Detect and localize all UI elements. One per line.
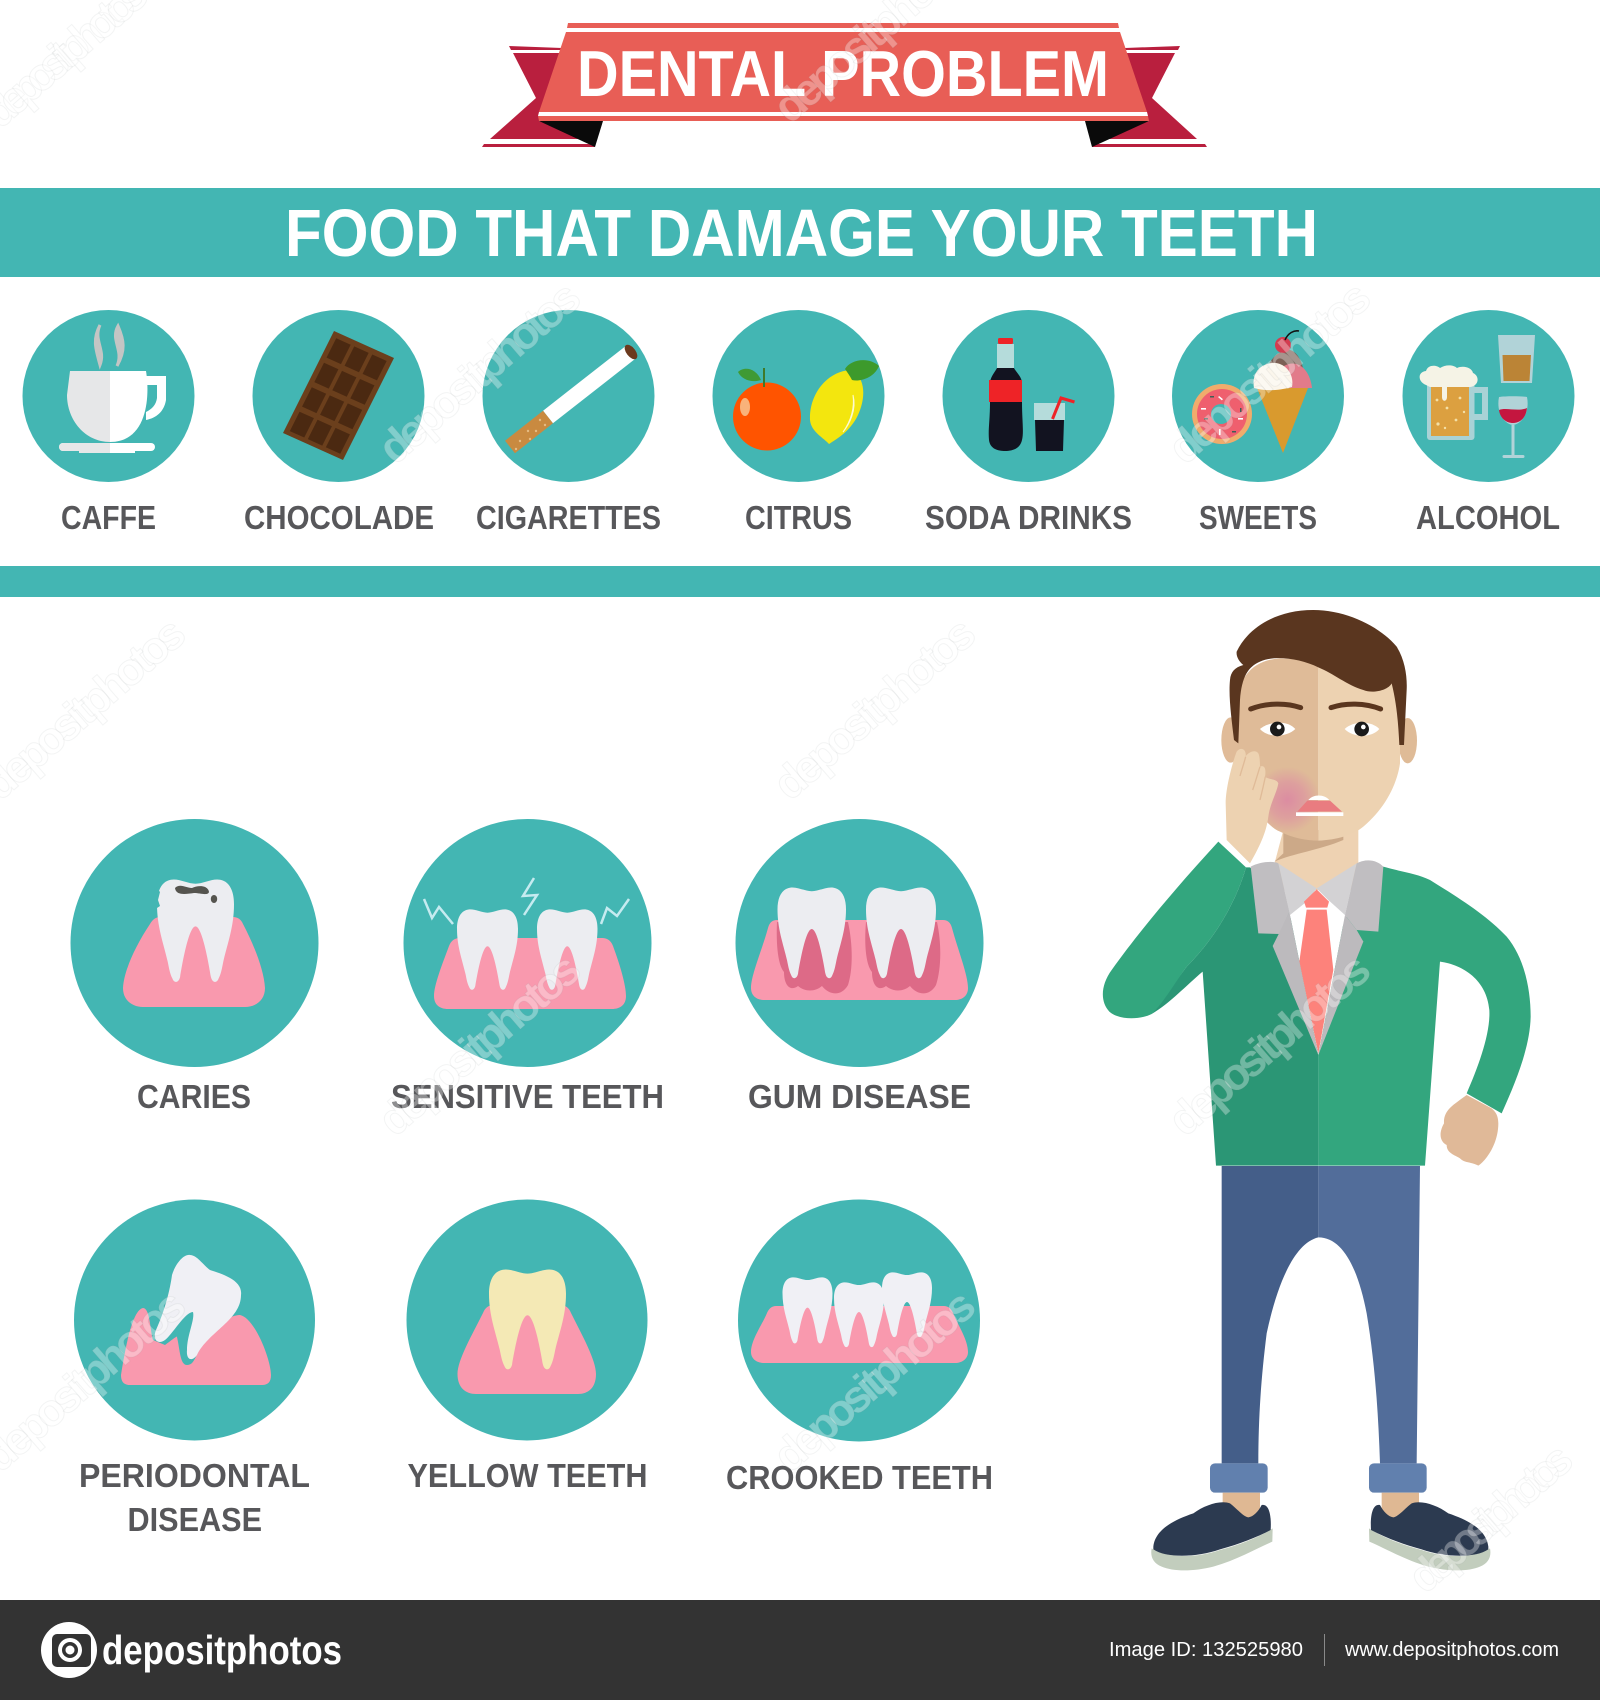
label: crooked teeth: CROOKED TEETH (726, 1459, 993, 1496)
label: chocolade: CHOCOLADE (244, 499, 434, 536)
trousers (1210, 1166, 1427, 1493)
label: citrus: CITRUS (745, 499, 852, 536)
title ribbon: dental problem (482, 23, 1207, 147)
title text: DENTAL PROBLEM (577, 37, 1109, 110)
label: periodontal disease: DISEASE (128, 1501, 262, 1538)
footer bar (0, 1600, 1600, 1700)
label: gum disease: GUM DISEASE (748, 1078, 971, 1115)
divider band (0, 566, 1600, 597)
heading band: food that damage your teeth: FOOD THAT DAMAGE YOUR TEETH (285, 196, 1318, 271)
food item: soda drinks (942, 310, 1114, 482)
label: sweets: SWEETS (1199, 499, 1317, 536)
feet (1151, 1493, 1490, 1570)
problem: caries (70, 819, 318, 1115)
neck (1274, 830, 1358, 890)
food item: citrus (712, 310, 884, 482)
label: cigarettes: CIGARETTES (476, 499, 661, 536)
food item: cigarette (482, 310, 654, 482)
watermarks: depositphotos (763, 607, 985, 810)
panel: foods (22, 310, 1574, 536)
label: periodontal disease: PERIODONTAL (79, 1457, 310, 1494)
hair (1230, 610, 1407, 745)
ribbon right tail (1085, 46, 1207, 147)
label: sensitive teeth: SENSITIVE TEETH (391, 1078, 664, 1115)
food item: sweets (1172, 310, 1344, 482)
mouth (1296, 795, 1343, 816)
label: caries: CARIES (137, 1078, 251, 1115)
food item: chocolate (252, 310, 424, 482)
face (1237, 658, 1400, 841)
hand on cheek (1226, 749, 1278, 863)
eyebrows (1251, 704, 1381, 709)
watermarks: depositphotos (1158, 943, 1380, 1146)
panel: dental problems (70, 819, 993, 1538)
man: legs and fist (1151, 1095, 1498, 1570)
fist (1441, 1095, 1498, 1166)
watermarks: depositphotos (1158, 271, 1380, 474)
problem: gum disease (736, 819, 984, 1115)
watermarks: depositphotos (1398, 1433, 1583, 1603)
ears (1221, 717, 1417, 763)
label: alcohol: ALCOHOL (1416, 499, 1560, 536)
label: yellow teeth: YELLOW TEETH (408, 1457, 648, 1494)
ribbon centre (538, 23, 1149, 121)
problem: yellow teeth (406, 1200, 648, 1494)
food item: alcohol (1402, 310, 1574, 482)
man: upper body (1103, 610, 1531, 1166)
watermarks: depositphotos (763, 1279, 985, 1482)
label: soda drinks: SODA DRINKS (925, 499, 1132, 536)
footer url: www.depositphotos.com (1344, 1639, 1559, 1661)
footer logo: depositphotos (102, 1627, 342, 1673)
image id: Image ID: 132525980 (1109, 1639, 1303, 1661)
shirt, tie and lapels (1251, 860, 1383, 1055)
problem: crooked teeth (726, 1200, 993, 1496)
heading band: food that damage your teeth (0, 188, 1600, 277)
watermarks: depositphotos (368, 271, 590, 474)
problem: periodontal disease (74, 1200, 315, 1538)
eyes (1260, 722, 1379, 736)
jacket (1103, 842, 1531, 1166)
ribbon left tail (482, 46, 603, 147)
food labels (61, 499, 1560, 536)
label: caffe: CAFFE (61, 499, 156, 536)
food item: coffee (22, 310, 194, 482)
character: man with toothache (1103, 610, 1531, 1570)
footer logo (41, 1622, 342, 1678)
problem: sensitive teeth (391, 819, 664, 1115)
watermarks: depositphotos (368, 943, 590, 1146)
